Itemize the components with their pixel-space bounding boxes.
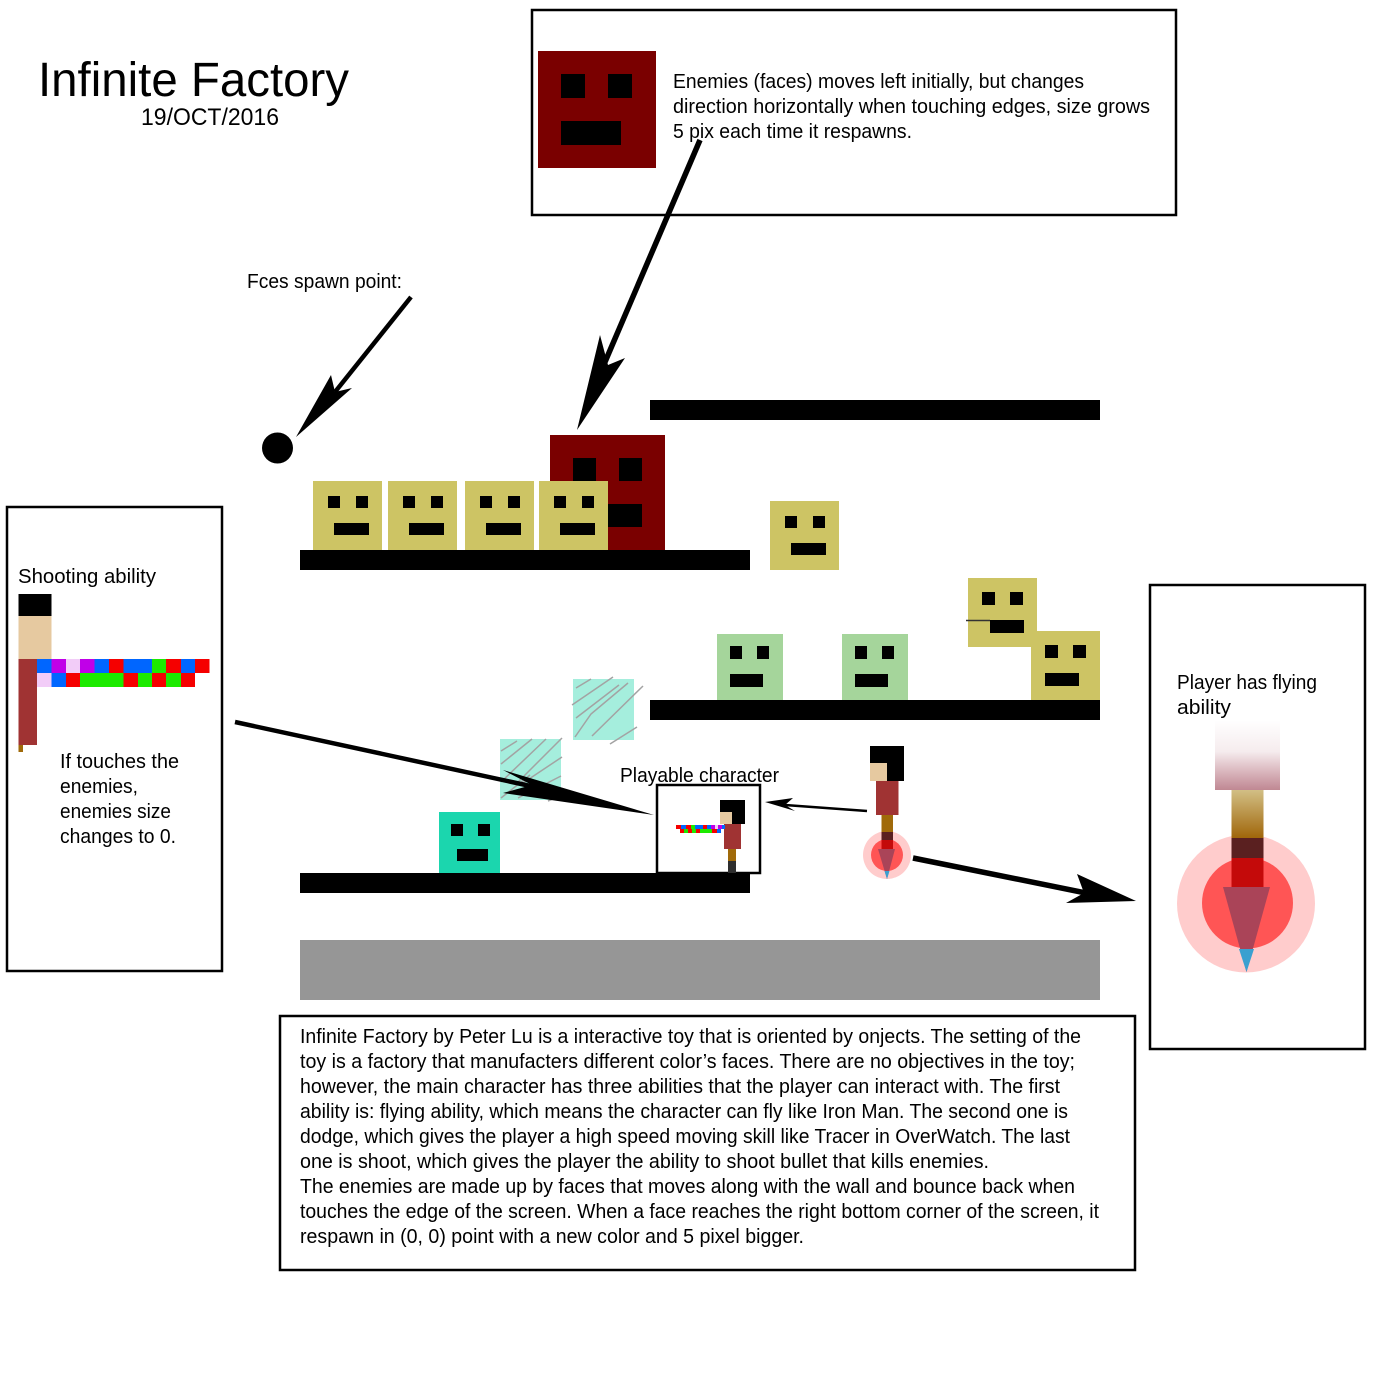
arrow: shooting panel to character	[235, 722, 654, 815]
platform: top right	[650, 400, 1100, 420]
yellow face 3	[465, 481, 534, 550]
shooting description: changes to 0.	[60, 825, 176, 848]
yellow face falling	[770, 501, 839, 570]
hatched face lower	[500, 738, 562, 801]
green face 2	[842, 634, 908, 700]
enemies text: Enemies (faces) moves left initially, but changes	[673, 70, 1084, 93]
icon: large red face	[538, 51, 656, 168]
bullets	[676, 825, 725, 833]
spawn point dot	[262, 432, 293, 464]
description text: touches the edge of the screen. When a face reaches the right bottom corner of the screen, it	[300, 1200, 1099, 1223]
platform: middle right	[650, 700, 1100, 720]
teal face	[439, 812, 500, 873]
playable character flying	[863, 746, 911, 879]
date: 19/OCT/2016	[141, 104, 279, 131]
title: Infinite Factory	[38, 54, 349, 107]
description text: Infinite Factory by Peter Lu is a interactive toy that is oriented by onjects. The setting of the	[300, 1025, 1081, 1048]
hair	[720, 800, 745, 824]
ground	[300, 940, 1100, 1000]
flying heading: Player has flying	[1177, 671, 1317, 694]
arrow: character to close-up	[765, 798, 867, 811]
leg	[728, 849, 736, 861]
arrow: to spawn point	[296, 297, 411, 437]
arrow: character to flying panel	[913, 858, 1136, 903]
character shooting	[18, 594, 210, 752]
spawn point label: Fces spawn point:	[247, 270, 402, 293]
description text: The enemies are made up by faces that moves along with the wall and bounce back when	[300, 1175, 1075, 1198]
description text	[300, 1025, 1099, 1248]
yellow face lower right	[1031, 631, 1100, 700]
description text: however, the main character has three abilities that the player can interact with. The first	[300, 1075, 1060, 1098]
platform: upper left	[300, 550, 750, 570]
jetpack flame illustration	[1177, 720, 1315, 972]
shooting heading: Shooting ability	[18, 565, 157, 588]
description text: one is shoot, which gives the player the ability to shoot bullet that kills enemies.	[300, 1150, 989, 1173]
enemies text: direction horizontally when touching edges, size grows	[673, 95, 1150, 118]
platform: lower left	[300, 873, 750, 893]
yellow face 4	[539, 481, 608, 550]
face skin	[720, 812, 732, 824]
yellow face 1	[313, 481, 382, 550]
big red face	[550, 435, 665, 550]
flying heading: ability	[1177, 696, 1232, 719]
shooting description: enemies size	[60, 800, 171, 823]
title	[38, 54, 349, 131]
panel: description	[280, 1016, 1135, 1270]
yellow face upper right	[966, 578, 1037, 647]
shooting description: enemies,	[60, 775, 138, 798]
foot	[728, 861, 736, 873]
panel: shooting ability	[7, 507, 222, 971]
green face 1	[717, 634, 783, 700]
description text: ability is: flying ability, which means the character can fly like Iron Man. The second one is	[300, 1100, 1068, 1123]
description text: toy is a factory that manufacters different color’s faces. There are no objectives in the toy;	[300, 1050, 1075, 1073]
enemies text	[673, 70, 1150, 143]
body	[724, 824, 741, 849]
panel: enemies explanation	[532, 10, 1176, 215]
panel: character close-up with bullets	[657, 785, 760, 873]
enemies text: 5 pix each time it respawns.	[673, 120, 912, 143]
arrow: to big red face	[577, 140, 700, 430]
description text: respawn in (0, 0) point with a new color and 5 pixel bigger.	[300, 1225, 804, 1248]
shooting description: If touches the	[60, 750, 179, 773]
panel: flying ability	[1150, 585, 1365, 1049]
flying heading	[1177, 671, 1317, 719]
playable character label: Playable character	[620, 764, 779, 787]
yellow face 2	[388, 481, 457, 550]
description text: dodge, which gives the player a high speed moving skill like Tracer in OverWatch. The last	[300, 1125, 1070, 1148]
shooting description	[60, 750, 179, 848]
hatched face upper	[572, 677, 643, 744]
